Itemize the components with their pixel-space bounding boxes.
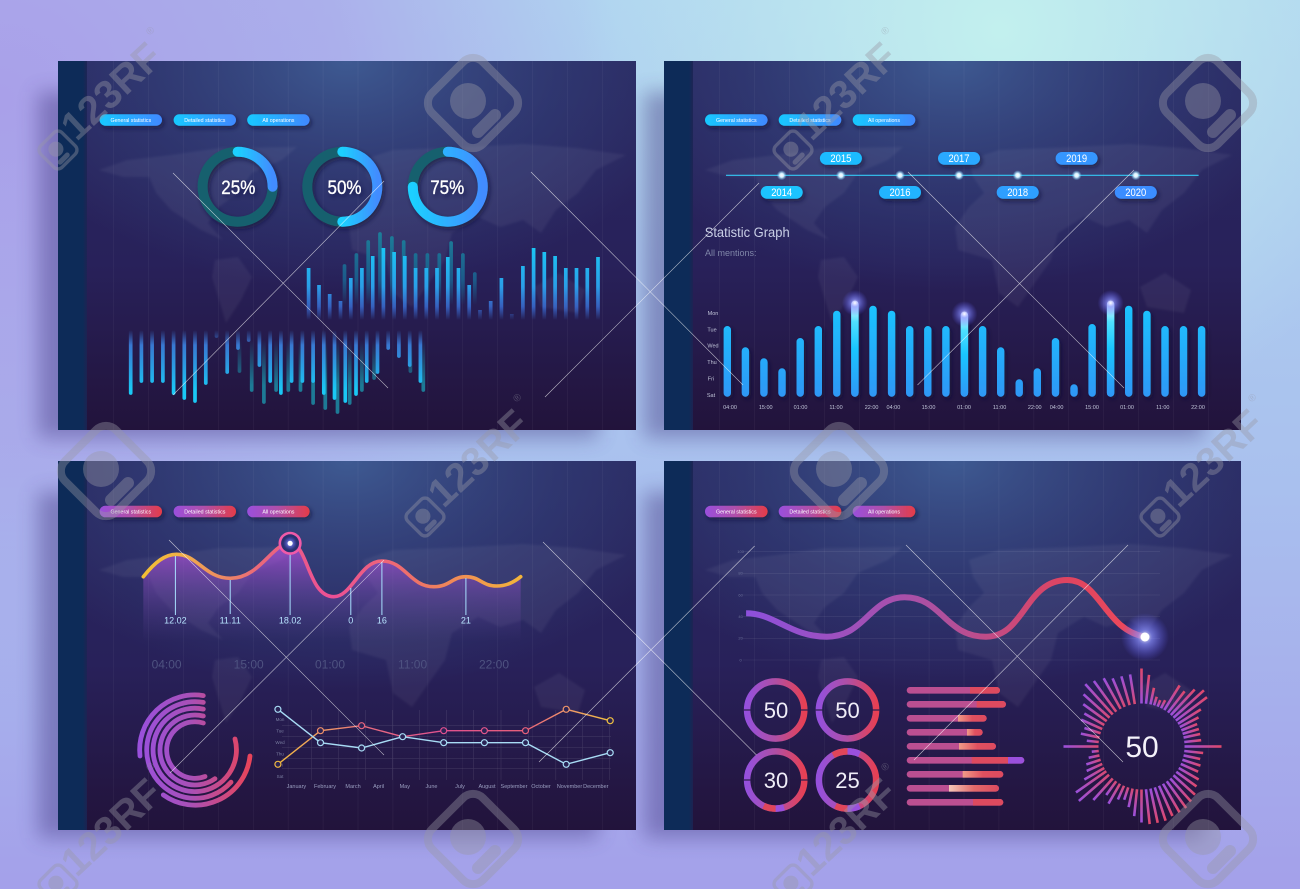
timeline: 2020 xyxy=(1125,187,1146,199)
faint time axis: 01:00 xyxy=(315,657,345,671)
panel: area curve, rings and line chart xyxy=(58,461,636,830)
heading: statistic graph: Statistic Graph xyxy=(705,225,790,240)
time labels xyxy=(723,405,1205,411)
line chart: November xyxy=(557,784,582,790)
line chart: March xyxy=(345,784,361,790)
tabs: General statistics xyxy=(716,509,757,515)
time labels: 01:00 xyxy=(1120,405,1134,411)
panel: donuts and bar charts xyxy=(58,61,636,430)
line chart: January xyxy=(287,784,306,790)
day labels: Mon xyxy=(708,311,718,317)
tabs: All operations xyxy=(262,118,295,124)
lower bar chart xyxy=(131,332,423,412)
line chart: June xyxy=(426,784,437,790)
area curve chart: 21 xyxy=(461,616,471,626)
time labels: 04:00 xyxy=(887,405,900,411)
time labels: 04:00 xyxy=(723,405,737,411)
panel: timeline and statistic graph xyxy=(664,61,1241,430)
watermark text row 1 left: 123RF xyxy=(53,35,171,149)
time labels: 11:00 xyxy=(1156,405,1169,411)
day labels: Fri xyxy=(708,377,714,383)
time labels: 22:00 xyxy=(1028,405,1042,411)
day labels: Tue xyxy=(707,327,717,333)
area curve chart: 16 xyxy=(377,616,387,626)
donut 75% xyxy=(413,152,483,222)
faint time axis: 15:00 xyxy=(234,657,264,671)
timeline: 2014 xyxy=(771,187,792,199)
faint time axis: 22:00 xyxy=(479,657,509,671)
gauge 30 xyxy=(744,751,808,809)
watermark logo large xyxy=(422,52,524,154)
watermark logo large xyxy=(422,788,524,889)
tabs: Detailed statistics xyxy=(789,118,831,124)
tabs: General statistics xyxy=(716,118,757,124)
watermark text row 2 left: ® xyxy=(511,391,525,405)
time labels: 22:00 xyxy=(865,405,878,411)
line chart: Fri xyxy=(277,762,283,768)
watermark text row 1 right: ® xyxy=(879,24,893,38)
panel: wave, gauges, bars and radial chart xyxy=(664,461,1241,830)
upper bar chart xyxy=(309,234,598,320)
line chart: May xyxy=(400,784,410,790)
timeline xyxy=(726,152,1199,199)
watermark text row 3 left: ® xyxy=(144,760,158,774)
line chart: April xyxy=(373,784,384,790)
area curve chart: 12.02 xyxy=(164,616,187,626)
time labels: 11:00 xyxy=(993,405,1006,411)
time labels: 11:00 xyxy=(829,405,843,411)
subheading: all mentions: All mentions: xyxy=(705,248,757,258)
watermark logo small xyxy=(404,496,446,538)
watermark text row 3 left: 123RF xyxy=(53,771,171,885)
watermark text row 1 left: ® xyxy=(144,24,158,38)
watermark logo large xyxy=(788,420,890,522)
timeline: 2019 xyxy=(1066,153,1087,165)
gauge 25: 25 xyxy=(835,768,860,793)
tabs: General statistics xyxy=(110,509,151,515)
horizontal bars xyxy=(907,687,1024,806)
tabs: All operations xyxy=(868,509,900,515)
time labels: 22:00 xyxy=(1191,405,1205,411)
watermark logo large xyxy=(1157,788,1259,889)
gauge 30: 30 xyxy=(764,768,788,793)
gauge 50 xyxy=(816,681,879,739)
line chart xyxy=(275,706,613,790)
time labels: 01:00 xyxy=(957,405,971,411)
donut 25% xyxy=(203,152,273,222)
area curve chart: 11.11 xyxy=(220,616,241,626)
area curve chart: 0 xyxy=(348,616,353,626)
gauge 25 xyxy=(819,751,876,809)
wave chart xyxy=(737,549,1169,662)
donut 50%: 50% xyxy=(328,178,362,199)
line chart: July xyxy=(455,784,465,790)
tabs xyxy=(100,114,310,126)
time labels: 04:00 xyxy=(1050,405,1063,411)
time labels: 15:00 xyxy=(759,405,773,411)
bar chart xyxy=(727,290,1202,397)
line chart: September xyxy=(501,784,528,790)
watermark text row 3 right: 123RF xyxy=(788,771,906,885)
line chart: February xyxy=(314,784,336,790)
tabs: Detailed statistics xyxy=(184,118,226,124)
tabs xyxy=(705,114,915,126)
time labels: 01:00 xyxy=(794,405,807,411)
faint time axis xyxy=(152,657,509,671)
watermark text row 3 right: ® xyxy=(879,760,893,774)
watermark text row 1 right: 123RF xyxy=(788,35,906,149)
faint time axis: 04:00 xyxy=(152,657,182,671)
wave chart: 60 xyxy=(738,592,744,597)
wave chart: 100 xyxy=(737,549,745,554)
timeline: 2015 xyxy=(830,153,851,165)
gauge 50: 50 xyxy=(835,698,860,723)
donut 50% xyxy=(307,152,377,222)
line chart: Wed xyxy=(275,740,285,745)
wave chart: 0 xyxy=(739,657,742,662)
wave chart: 80 xyxy=(738,571,744,576)
watermark logo small xyxy=(37,863,79,889)
tabs: Detailed statistics xyxy=(789,509,831,515)
donut 25%: 25% xyxy=(221,178,255,199)
day labels xyxy=(707,311,719,399)
watermark logo small xyxy=(772,129,814,171)
watermark logo small xyxy=(772,863,814,889)
watermark logo large xyxy=(1157,52,1259,154)
tabs xyxy=(100,506,310,517)
tabs: All operations xyxy=(262,509,295,515)
radial burst chart xyxy=(1064,668,1222,824)
timeline: 2016 xyxy=(890,187,910,199)
thin diagonal cross lines xyxy=(169,170,1134,773)
faint time axis: 11:00 xyxy=(398,657,427,671)
line chart: Sat xyxy=(277,774,284,779)
radial burst chart: 50 xyxy=(1125,731,1159,764)
tabs: General statistics xyxy=(110,118,151,124)
watermark logo small xyxy=(1139,496,1181,538)
line chart: August xyxy=(478,784,496,790)
watermark logo large xyxy=(55,420,157,522)
tabs xyxy=(705,506,915,517)
time labels: 15:00 xyxy=(1085,405,1099,411)
tabs: Detailed statistics xyxy=(184,509,226,515)
gauge 50: 50 xyxy=(764,698,788,723)
donut 75%: 75% xyxy=(430,178,464,199)
line chart: Thu xyxy=(276,752,284,756)
tabs: All operations xyxy=(868,118,900,124)
line chart: Mon xyxy=(276,717,285,722)
watermark logo small xyxy=(37,129,79,171)
watermark text row 2 right: 123RF xyxy=(1155,402,1273,516)
timeline: 2018 xyxy=(1007,187,1028,199)
gauge 50 xyxy=(744,681,808,739)
line chart: Tue xyxy=(276,728,284,734)
day labels: Wed xyxy=(707,344,719,350)
wave chart: 20 xyxy=(738,636,744,641)
watermark text row 2 right: ® xyxy=(1246,391,1260,405)
timeline: 2017 xyxy=(948,153,970,165)
day labels: Sat xyxy=(707,393,716,399)
area curve chart xyxy=(143,532,521,642)
concentric rings chart xyxy=(140,695,250,805)
line chart: December xyxy=(583,784,609,790)
day labels: Thu xyxy=(707,360,717,366)
line chart: October xyxy=(531,784,551,790)
watermark text row 2 left: 123RF xyxy=(420,402,538,516)
area curve chart: 18.02 xyxy=(279,616,301,626)
time labels: 15:00 xyxy=(922,405,935,411)
wave chart: 40 xyxy=(738,614,744,619)
